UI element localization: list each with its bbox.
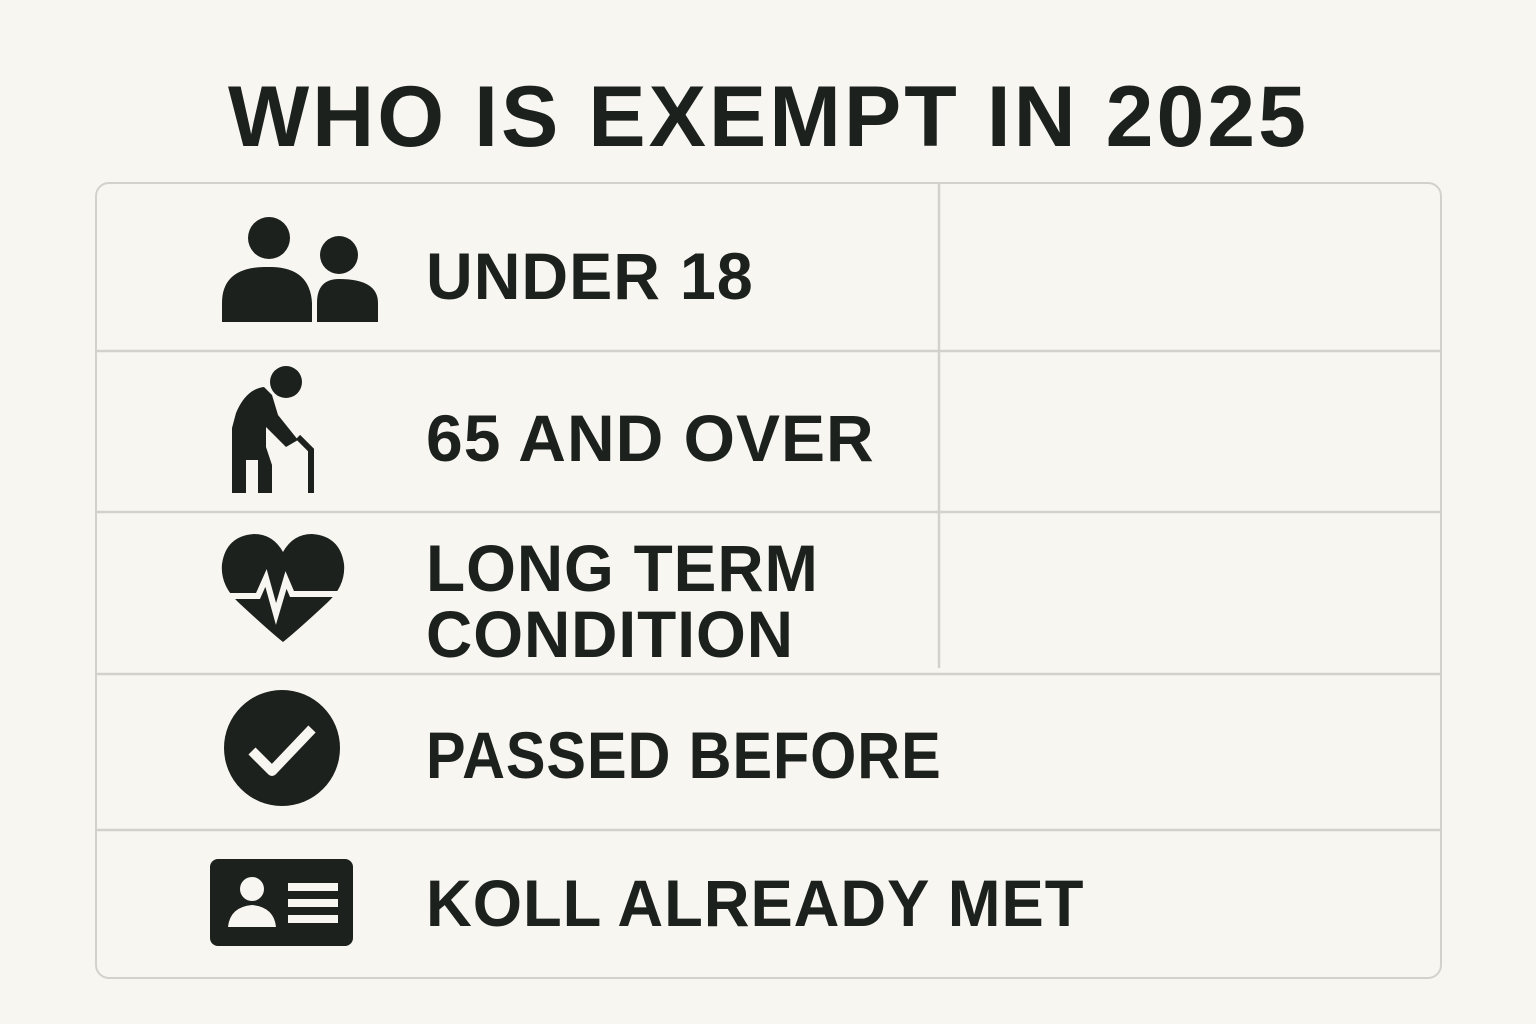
icon: heart with pulse — [222, 534, 344, 642]
label: koll already met: KOLL ALREADY MET — [426, 866, 1084, 940]
label: long term condition — [426, 531, 819, 671]
table panel — [95, 182, 1442, 979]
label: long term condition: LONG TERM — [426, 531, 819, 605]
label: passed before: PASSED BEFORE — [426, 718, 942, 792]
icon: id card — [210, 859, 353, 946]
title: WHO IS EXEMPT IN 2025 — [228, 69, 1309, 165]
label: under 18: UNDER 18 — [426, 239, 754, 313]
label: long term condition: CONDITION — [426, 597, 794, 671]
label: 65 and over: 65 AND OVER — [426, 401, 875, 475]
icon: people — [222, 217, 378, 322]
icon: elderly person — [232, 366, 314, 493]
icon: check circle — [224, 690, 340, 806]
